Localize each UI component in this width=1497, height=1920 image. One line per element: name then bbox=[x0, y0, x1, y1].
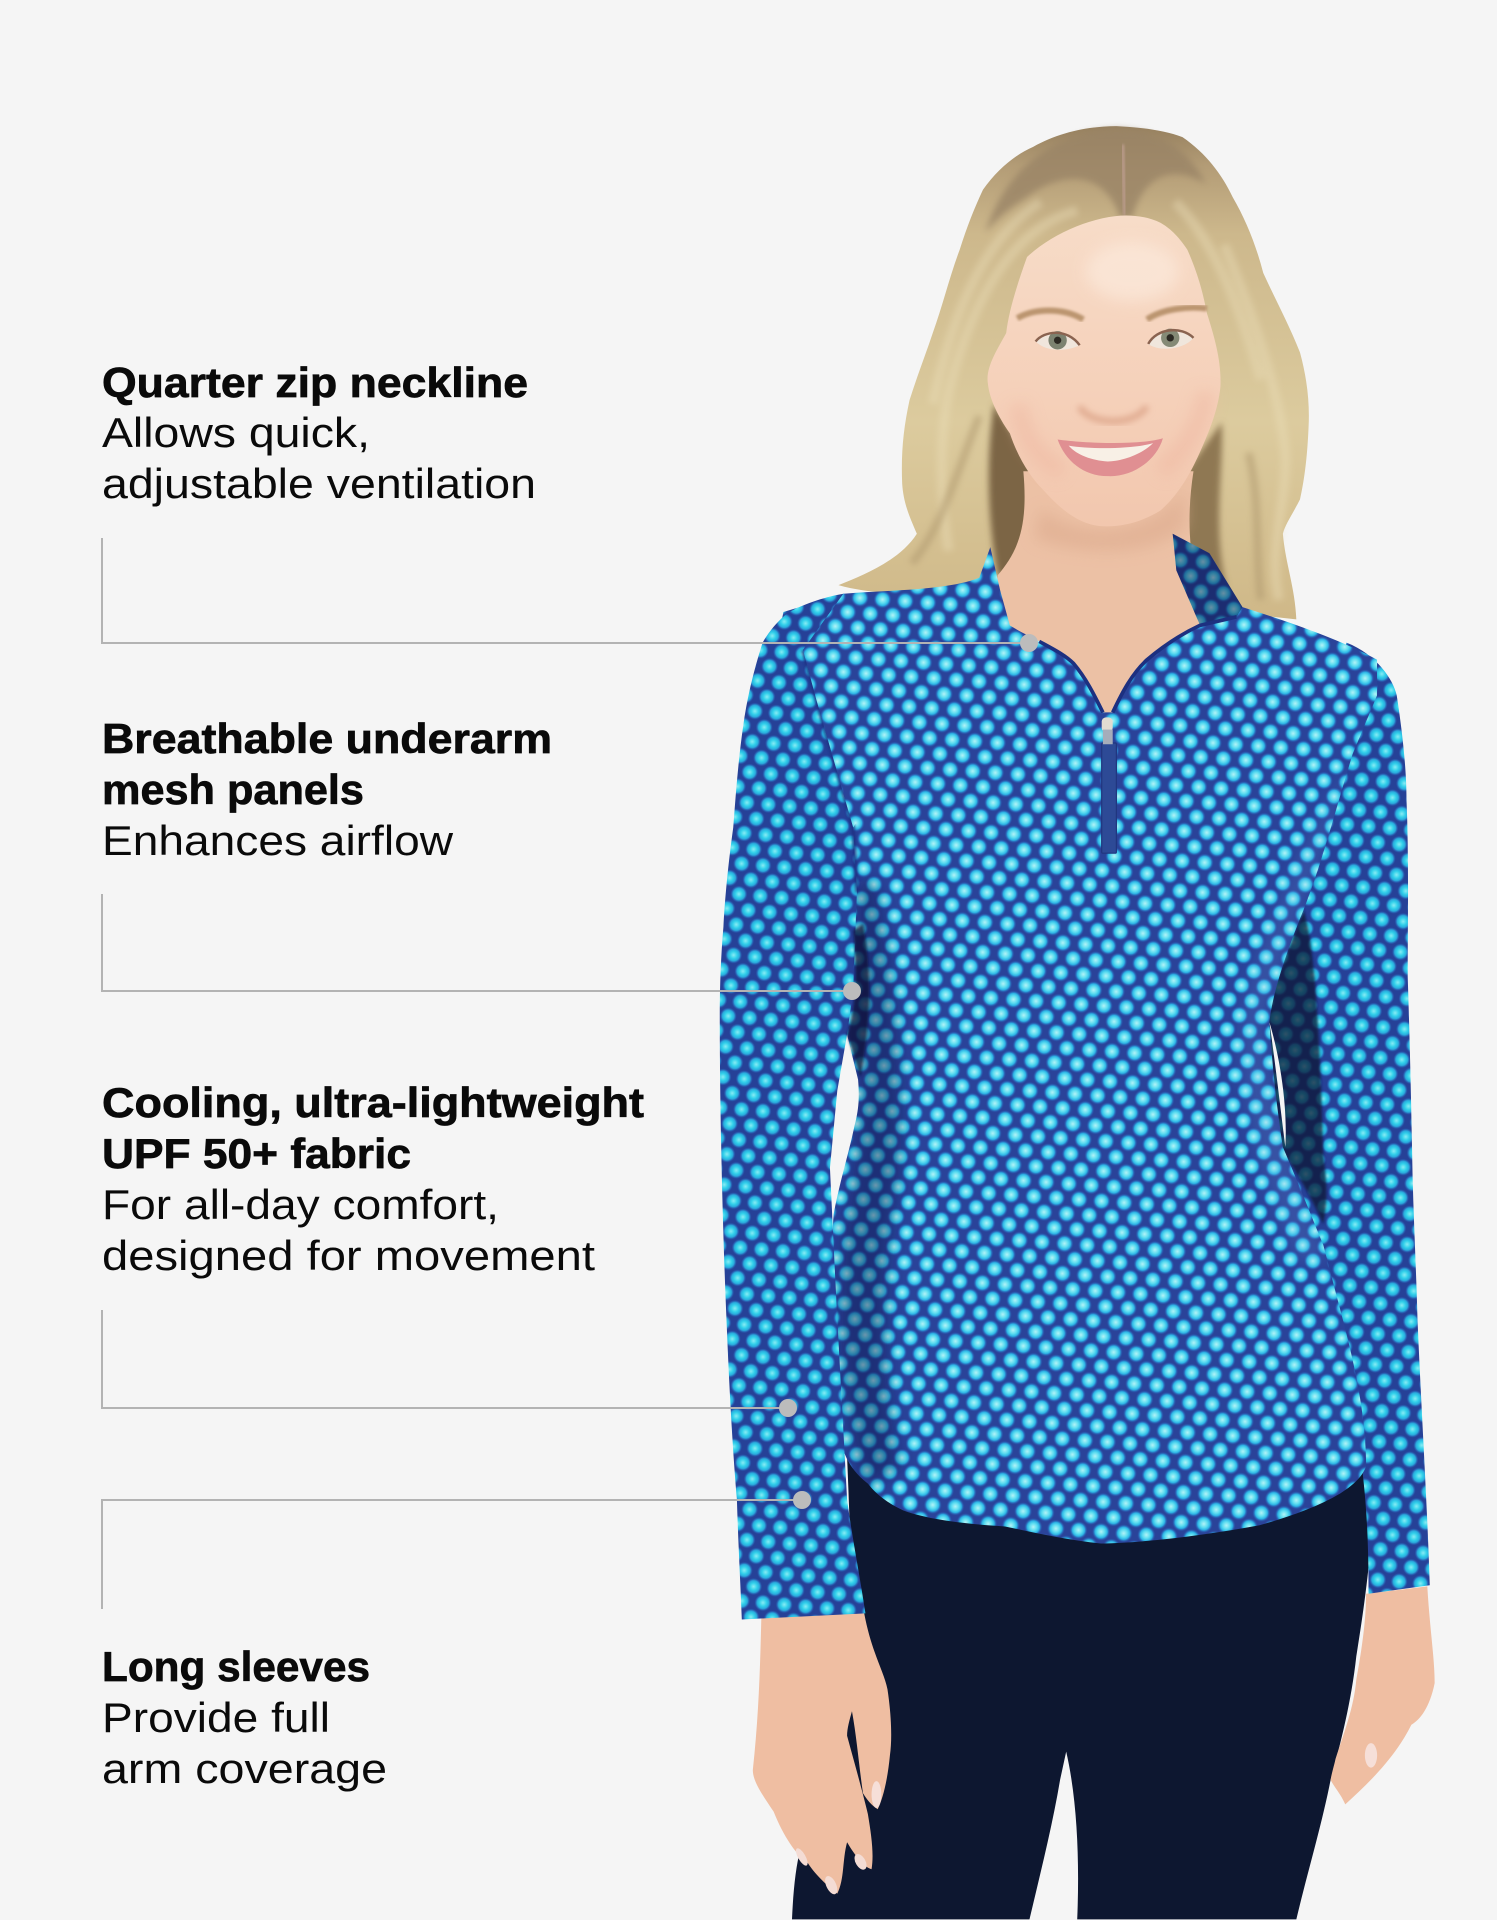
dark hair right of neck bbox=[1181, 422, 1227, 588]
sliver of background at right underarm bbox=[1269, 1022, 1286, 1147]
callout: fabric bbox=[102, 1079, 644, 1279]
nail bbox=[1365, 1743, 1377, 1768]
heading: Long sleeves bbox=[102, 1643, 370, 1690]
callout: long sleeves bbox=[102, 1643, 387, 1792]
lips bbox=[1058, 438, 1163, 476]
description line 1: For all-day comfort, bbox=[102, 1181, 499, 1228]
nose bbox=[1080, 406, 1147, 421]
heading: Quarter zip neckline bbox=[102, 359, 528, 406]
description line 1: Allows quick, bbox=[102, 409, 370, 456]
left sleeve bbox=[720, 594, 865, 1619]
leader line: long sleeves bbox=[102, 1491, 811, 1609]
left hand bbox=[753, 1613, 891, 1896]
description line 2: designed for movement bbox=[102, 1232, 595, 1279]
left sleeve seam bbox=[803, 650, 857, 892]
shading along right side bbox=[1242, 808, 1332, 1259]
right hand bbox=[1331, 1586, 1435, 1804]
description line 2: arm coverage bbox=[102, 1745, 387, 1792]
right eye bbox=[1148, 329, 1193, 349]
left eye bbox=[1036, 331, 1080, 350]
description line 1: Provide full bbox=[102, 1694, 330, 1741]
heading line 2: UPF 50+ fabric bbox=[102, 1130, 411, 1177]
zip pull bbox=[1102, 717, 1113, 744]
nails bbox=[872, 1781, 881, 1808]
dark hair left of neck bbox=[989, 404, 1034, 575]
shading along left side bbox=[840, 881, 901, 1487]
hair bbox=[839, 126, 1309, 619]
zip placket bbox=[1102, 743, 1116, 853]
leader line: mesh panels bbox=[102, 894, 861, 1000]
neckline edges bbox=[1039, 617, 1236, 712]
torso bbox=[782, 547, 1378, 1544]
hair lock shading bbox=[912, 416, 1261, 600]
teeth bbox=[1069, 443, 1153, 461]
leader line: fabric bbox=[102, 1310, 797, 1417]
right collar bbox=[1173, 534, 1242, 624]
leader line: quarter zip bbox=[102, 538, 1038, 652]
underarm mesh panel right bbox=[1261, 910, 1326, 1224]
heading line 2: mesh panels bbox=[102, 766, 364, 813]
heading line 1: Cooling, ultra-lightweight bbox=[102, 1079, 644, 1126]
model photo illustration bbox=[720, 126, 1435, 1919]
hair roots bbox=[985, 129, 1206, 233]
description line 2: adjustable ventilation bbox=[102, 460, 536, 507]
heading line 1: Breathable underarm bbox=[102, 715, 552, 762]
callout: quarter zip neckline bbox=[102, 359, 536, 507]
hair parting bbox=[1122, 144, 1125, 215]
trousers bbox=[792, 1457, 1376, 1919]
face bbox=[988, 215, 1221, 526]
dark fold at armpit bbox=[847, 924, 869, 1077]
hair strands bbox=[933, 202, 1286, 600]
cheeks bbox=[1018, 392, 1206, 471]
neck and chest bbox=[998, 471, 1212, 722]
eyebrows bbox=[1017, 308, 1207, 319]
shirt bbox=[720, 534, 1430, 1619]
description: Enhances airflow bbox=[102, 817, 454, 864]
shoulder yoke over sleeve bbox=[803, 594, 979, 827]
callout: mesh panels bbox=[102, 715, 552, 864]
right sleeve bbox=[1224, 643, 1430, 1594]
neck shadow bbox=[1034, 490, 1185, 551]
forehead highlight bbox=[1086, 242, 1179, 301]
